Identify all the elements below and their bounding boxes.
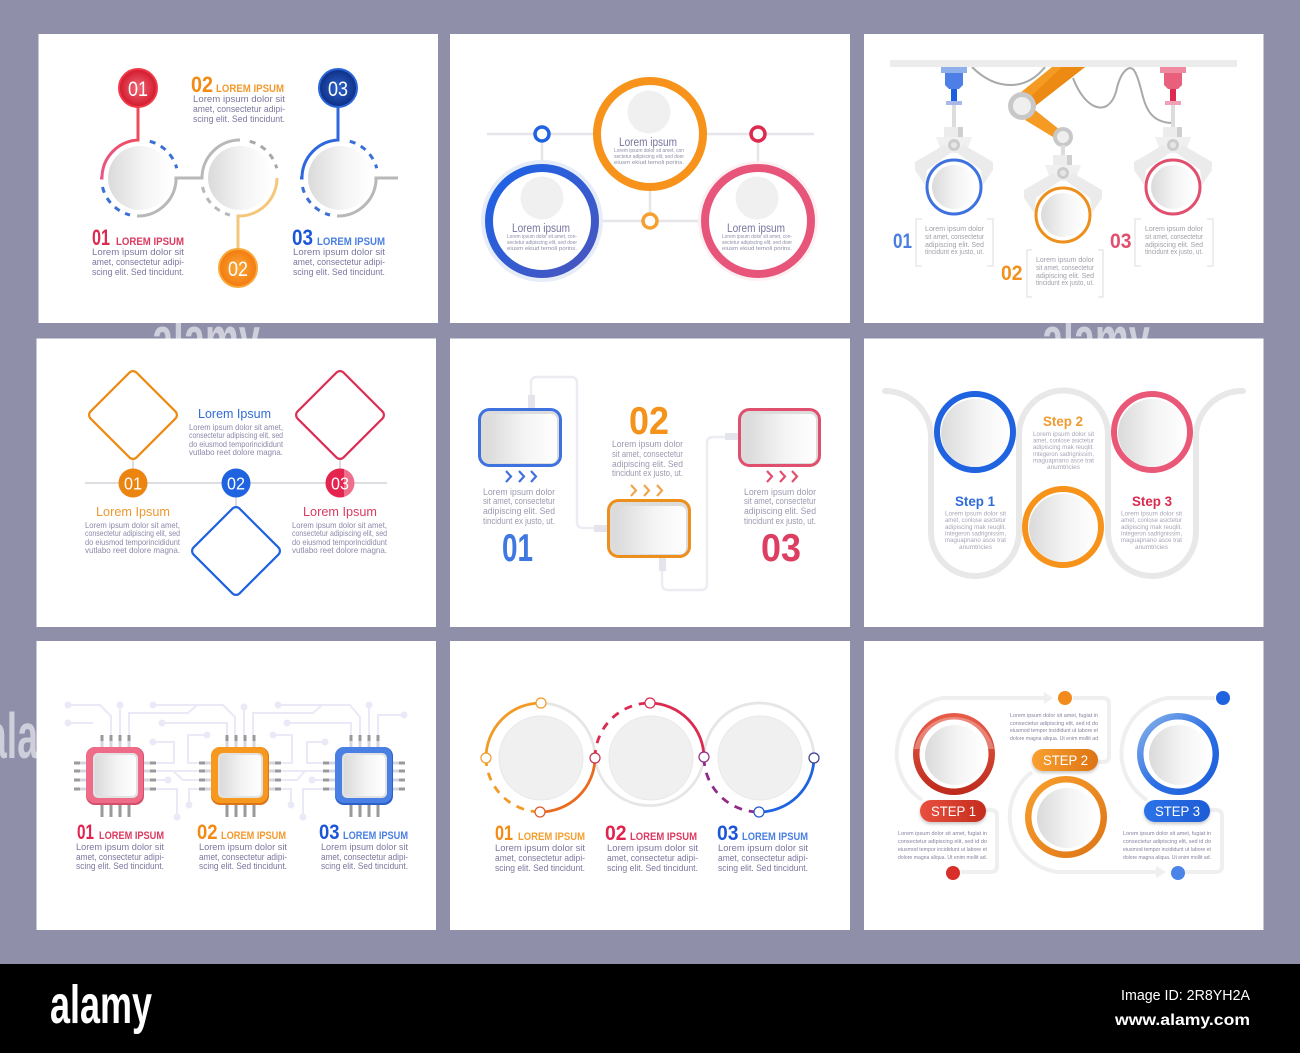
text block orange: Lorem ipsum dolor sit amet, [85, 520, 180, 530]
text block 01: Lorem ipsum dolor sit [92, 247, 185, 257]
pill step 2 [1032, 749, 1098, 771]
chevrons 1 [506, 471, 536, 482]
watermark fragments between panels: alamy [152, 305, 260, 374]
text block 03: Lorem ipsum dolor sit [293, 247, 386, 257]
label 02: tincidunt ex justo, ut. [1036, 278, 1094, 287]
panel background 2 [450, 34, 850, 323]
text block 01: 01 [77, 821, 94, 844]
circuit traces [68, 705, 404, 817]
step 1 text: maguapnano asce trat [945, 537, 1006, 544]
text block 02: scing elit. Sed tincidunt. [193, 114, 285, 124]
step 3 text: Lorem ipsum dolor sit amet, fugiat in [1123, 831, 1211, 837]
panel: step pills with flow arrows [864, 641, 1264, 930]
badge 02: 02 [228, 258, 248, 281]
blue ring [481, 160, 603, 282]
label 03: Lorem ipsum dolor [1145, 224, 1203, 233]
text block blue: vutlabo reet dolore magna. [189, 447, 283, 457]
label 01 [893, 219, 993, 266]
step 2 text: adipiscing mak reuqlit. [1033, 444, 1094, 451]
text block 01: 01 [92, 225, 110, 250]
text block 02 [197, 821, 287, 871]
step 1 text: anumtricies [959, 544, 993, 551]
text block 03: sit amet, consectetur [744, 496, 816, 506]
gripper 2 [1024, 155, 1102, 242]
badge 01: 01 [128, 78, 148, 101]
circuit nodes [64, 702, 408, 820]
text block red: consectetur adipiscing elit, sed [292, 528, 387, 538]
text block 01: Lorem ipsum dolor sit [76, 842, 164, 852]
circle placeholders [108, 146, 372, 210]
text block 03: 03 [717, 822, 738, 845]
pill step 1: STEP 1 [931, 803, 976, 819]
text block 01: Lorem ipsum dolor [483, 487, 555, 497]
label 02 [1001, 250, 1103, 297]
step 3 text: consectetur adipiscing elit, sed id do [1123, 839, 1211, 845]
inner gray circles [499, 716, 802, 800]
chip pink [74, 735, 156, 817]
text block 02: Lorem ipsum dolor sit [193, 94, 286, 104]
text block 03: Lorem ipsum dolor sit [718, 843, 809, 853]
text block 02: amet, consectetur adipi- [607, 853, 698, 863]
panel background 6 [864, 338, 1264, 627]
panel background 1 [38, 34, 438, 323]
chip blue [323, 735, 405, 817]
step 1 text: Integeron sadrignissim, [945, 530, 1006, 538]
cables [531, 377, 725, 590]
text block 01: adipiscing elit. Sed [483, 506, 555, 516]
step 3 text: adipiscing mak reuqlit. [1121, 524, 1182, 531]
step 1 text [945, 493, 1007, 551]
text block 02: amet, consectetur adipi- [199, 852, 287, 862]
panel background 9 [864, 641, 1264, 930]
diamond orange [87, 369, 179, 461]
step 1 text [898, 831, 987, 861]
red node [751, 127, 765, 141]
step 3 text [1121, 493, 1183, 551]
dot red [946, 866, 960, 880]
device 2 [608, 500, 690, 556]
badge 03 [326, 468, 355, 498]
blue actuator [941, 67, 967, 105]
label 03: sit amet, consectetur [1145, 232, 1203, 241]
step 2 text: amet, conlose asictetur [1033, 438, 1095, 444]
step 3 text: eiusmod tempor incididunt ut labore et [1123, 847, 1211, 853]
step 2 text: Step 2 [1043, 413, 1083, 429]
text block orange: Lorem Ipsum [96, 504, 170, 519]
panel background 5 [450, 338, 850, 627]
timeline [85, 459, 387, 507]
text block 02: tincidunt ex justo, ut. [612, 468, 683, 478]
step 2 text: Lorem ipsum dolor sit amet, fugiat in [1010, 713, 1098, 719]
red actuator [1160, 67, 1186, 105]
step 2 text: maguapnano asce trat [1033, 458, 1094, 464]
blue ring: Lorem ipsum [512, 223, 570, 235]
footer logo: alamy [50, 975, 152, 1035]
text block 01: 01 [495, 822, 513, 845]
step 2 text [1010, 713, 1098, 742]
orange ring: Lorem ipsum [619, 137, 677, 149]
step 2 text [1033, 413, 1095, 471]
badge 03 [319, 69, 357, 107]
text block 02 [605, 822, 699, 873]
rod red [1171, 105, 1175, 127]
step 2 text: Lorem ipsum dolor sit [1033, 431, 1094, 438]
orange ring: Lorem ipsum dolor sit amet, con [614, 148, 684, 154]
label 01: sit amet, consectetur [925, 232, 984, 241]
footer image id: Image ID: 2R8YH2A [1121, 988, 1250, 1004]
text block 03: LOREM IPSUM [317, 236, 385, 248]
text block orange: consectetur adipiscing elit, sed [85, 528, 180, 538]
diamond red [294, 369, 386, 461]
orange robot arm [1008, 67, 1085, 157]
orange node [643, 214, 657, 228]
text block 03: Lorem ipsum dolor [744, 487, 816, 497]
device 3 [740, 410, 820, 466]
text block 03: 03 [319, 821, 340, 844]
text block 02: amet, consectetur adipi- [193, 104, 285, 114]
text block 02: LOREM IPSUM [221, 830, 286, 842]
panel: timeline with numbered badges [38, 34, 438, 323]
text block 03 [744, 487, 816, 570]
text block 02: scing elit. Sed tincidunt. [607, 863, 698, 873]
step 3 text: Lorem ipsum dolor sit [1121, 510, 1182, 518]
text block 02: Lorem ipsum dolor sit [199, 842, 287, 852]
text block 02 [612, 400, 683, 478]
text block 01: amet, consectetur adipi- [92, 257, 184, 267]
text block 03: LOREM IPSUM [742, 831, 808, 843]
gray rings [541, 703, 814, 806]
text block 02: 02 [197, 821, 218, 844]
text block blue: Lorem ipsum dolor sit amet, [189, 422, 283, 432]
step 2 text: anumtricies [1047, 464, 1081, 471]
badge 01 [119, 69, 157, 107]
text block 02: adipiscing elit. Sed [612, 459, 683, 469]
blue circle [937, 394, 1013, 470]
text block 03: amet, consectetur adipi- [293, 257, 385, 267]
text block 03 [292, 225, 386, 277]
label 01: tincidunt ex justo, ut. [925, 247, 984, 256]
pill step 1 [920, 800, 986, 822]
dot orange [1058, 691, 1072, 705]
text block 01: Lorem ipsum dolor sit [495, 843, 586, 853]
watermark fragments between panels: alamy [1042, 305, 1150, 374]
footer url: www.alamy.com [1114, 1012, 1250, 1029]
text block blue: Lorem Ipsum [198, 406, 271, 421]
text block 03: 03 [761, 527, 801, 570]
text block 02: 02 [191, 72, 213, 97]
label 01: 01 [893, 230, 912, 253]
step 3 text: dolore magna aliqua. Ut enim mollit ad. [1123, 855, 1211, 861]
plugs [528, 395, 738, 571]
text block orange [85, 504, 181, 555]
step 1 text: Lorem ipsum dolor sit amet, fugiat in [898, 831, 987, 837]
panel: power banks with cables [450, 338, 850, 627]
ring 1 arcs [486, 703, 595, 812]
text block 02: scing elit. Sed tincidunt. [199, 861, 287, 871]
step 3 text: amet, conlose asictetur [1121, 517, 1183, 524]
ring 2 arcs [595, 703, 704, 758]
text block 02: 02 [629, 400, 669, 443]
step 2 text: dolore magna aliqua. Ut enim mollit ad [1010, 736, 1098, 742]
red ring: sectetur adipiscing elit, sed doer [722, 240, 792, 246]
text block 03 [717, 822, 809, 873]
text block 02: sit amet, consectetur [612, 449, 683, 459]
chevrons 2 [631, 485, 662, 496]
orange circle [1025, 489, 1101, 565]
flow arrowheads [1044, 692, 1166, 878]
text block 01: LOREM IPSUM [99, 830, 164, 842]
label 01: adipiscing elit. Sed [925, 240, 984, 249]
ribbon [885, 390, 1243, 576]
panel background 8 [450, 641, 850, 930]
dot blue [1216, 691, 1230, 705]
text block 03: Lorem ipsum dolor sit [321, 842, 408, 852]
text block 01 [76, 821, 164, 871]
text block red [292, 504, 388, 555]
panel background 4 [36, 338, 436, 627]
text block 01 [495, 822, 586, 873]
text block 01: LOREM IPSUM [116, 236, 184, 248]
blue node [535, 127, 549, 141]
watermark fragments between panels [0, 305, 1150, 772]
text block 03: tincidunt ex justo, ut. [744, 516, 816, 526]
step 1 text: consectetur adipiscing elit, sed id do [898, 839, 987, 845]
pill step 3: STEP 3 [1155, 803, 1200, 819]
orange ring: eiusm ekiud temoli porins. [614, 160, 684, 166]
text block blue [189, 406, 284, 457]
label 03: 03 [1110, 230, 1132, 253]
text block orange: do eiusmod temporincididunt [85, 537, 181, 547]
text block 03 [319, 821, 408, 871]
step 1 text: amet, conlose asictetur [945, 517, 1007, 524]
text block 01: 01 [502, 527, 533, 570]
step 3 text: Integeron sadrignissim, [1121, 530, 1182, 538]
orange ring: sectetur adipiscing elit, sed doer [614, 154, 684, 160]
text block 01: sit amet, consectetur [483, 496, 555, 506]
step 3 text: maguapnano asce trat [1121, 537, 1182, 544]
ring step 1 [913, 713, 995, 795]
step 2 text: consectetur adipiscing elit, sed id do [1010, 721, 1098, 727]
connecting timeline [78, 106, 398, 250]
text block 03: scing elit. Sed tincidunt. [321, 861, 408, 871]
text block 03: adipiscing elit. Sed [744, 506, 816, 516]
label 03: adipiscing elit. Sed [1145, 240, 1203, 249]
badge 01: 01 [124, 474, 142, 494]
footer bar [0, 964, 1300, 1053]
blue ring: eiusm ekiud temoli porins. [507, 246, 577, 252]
text block 03: scing elit. Sed tincidunt. [718, 863, 808, 873]
panel background 7 [36, 641, 436, 930]
panel: robotic grippers [864, 34, 1264, 323]
panel: diamonds on a timeline [36, 338, 436, 627]
step 3 text [1123, 831, 1211, 861]
pill step 3 [1144, 800, 1210, 822]
ceiling rail [890, 60, 1237, 67]
label 02: 02 [1001, 262, 1022, 285]
text block orange: vutlabo reet dolore magna. [85, 545, 180, 555]
panel background 3 [864, 34, 1264, 323]
text block red: vutlabo reet dolore magna. [292, 545, 387, 555]
ring step 3 [1137, 713, 1219, 795]
badge 02 [219, 249, 257, 287]
label 03: tincidunt ex justo, ut. [1145, 247, 1203, 256]
panel: winding ribbon steps [864, 338, 1264, 627]
text block 01: scing elit. Sed tincidunt. [495, 863, 585, 873]
text block 01: tincidunt ex justo, ut. [483, 516, 555, 526]
text block 03: scing elit. Sed tincidunt. [293, 267, 385, 277]
flow paths [897, 698, 1222, 872]
badge 03: 03 [331, 474, 349, 494]
ring 3 arcs [704, 758, 814, 812]
chevrons 3 [767, 471, 797, 482]
label 02: sit amet, consectetur [1036, 263, 1094, 272]
label 03 [1110, 219, 1213, 266]
text block 01 [92, 225, 185, 277]
text block 03: amet, consectetur adipi- [718, 853, 808, 863]
label 01: Lorem ipsum dolor [925, 224, 985, 233]
step 1 text: Step 1 [955, 493, 995, 509]
panel: interlocking circle rings [450, 641, 850, 930]
panel: microchips on a circuit [36, 641, 436, 930]
connector lines [487, 134, 814, 221]
text block 01: amet, consectetur adipi- [495, 853, 585, 863]
text block 03: amet, consectetur adipi- [321, 852, 408, 862]
text block blue: do eiusmod temporincididunt [189, 439, 284, 449]
badge 03: 03 [328, 78, 348, 101]
gripper 3 [1134, 127, 1212, 214]
device 1 [480, 410, 560, 466]
ring step 2 [1025, 776, 1107, 858]
step 2 text: Integeron sadrignissim, [1033, 451, 1094, 458]
red ring: eiusm ekiud temoli porins. [722, 246, 792, 252]
pill step 2: STEP 2 [1043, 752, 1088, 768]
step 3 text: Step 3 [1132, 493, 1172, 509]
step 1 text: adipiscing mak reuqlit. [945, 524, 1006, 531]
text block 02: Lorem ipsum dolor [612, 439, 683, 449]
step 1 text: Lorem ipsum dolor sit [945, 510, 1006, 518]
text block 01: scing elit. Sed tincidunt. [92, 267, 184, 277]
red ring [698, 161, 818, 281]
text block 02: LOREM IPSUM [630, 831, 697, 843]
label 02: adipiscing elit. Sed [1036, 271, 1094, 280]
step 1 text: eiusmod tempor incididunt ut labore et [898, 847, 987, 853]
diamond blue [190, 505, 282, 597]
orange ring [597, 81, 703, 187]
ring nodes [481, 698, 819, 817]
text block red: do eiusmod temporincididunt [292, 537, 388, 547]
text block 02: LOREM IPSUM [216, 83, 284, 95]
red ring: Lorem ipsum dolor sit amet, con- [722, 234, 792, 240]
text block 02: 02 [605, 822, 626, 845]
text block 02 [191, 72, 286, 124]
cables [972, 67, 1172, 123]
label 02: Lorem ipsum dolor [1036, 255, 1094, 264]
panel: three linked rings [450, 34, 850, 323]
dot blue light [1171, 866, 1185, 880]
text block red: Lorem Ipsum [303, 504, 377, 519]
gripper 1 [915, 127, 993, 214]
blue ring: Lorem ipsum dolor sit amet, con- [507, 234, 577, 240]
badge 02: 02 [227, 474, 245, 494]
badge 02 [222, 468, 250, 498]
blue ring: sectetur adipiscing elit, sed doer [507, 240, 577, 246]
text block 01: scing elit. Sed tincidunt. [76, 861, 164, 871]
text block 01 [483, 487, 555, 570]
text block red: Lorem ipsum dolor sit amet, [292, 520, 387, 530]
step 2 text: eiusmod tempor incididunt ut labore et [1010, 728, 1098, 734]
badge 01 [118, 468, 148, 498]
rod blue [952, 105, 956, 127]
red ring: Lorem ipsum [727, 223, 785, 235]
step 1 text: dolore magna aliqua. Ut enim mollit ad. [898, 855, 987, 861]
text block 03: LOREM IPSUM [343, 830, 408, 842]
step 3 text: anumtricies [1135, 544, 1169, 551]
text block 03: 03 [292, 225, 313, 250]
text block blue: consectetur adipiscing elit, sed [189, 430, 283, 440]
chip orange [199, 735, 281, 817]
red circle [1114, 394, 1190, 470]
text block 01: amet, consectetur adipi- [76, 852, 164, 862]
text block 02: Lorem ipsum dolor sit [607, 843, 699, 853]
text block 01: LOREM IPSUM [518, 831, 585, 843]
